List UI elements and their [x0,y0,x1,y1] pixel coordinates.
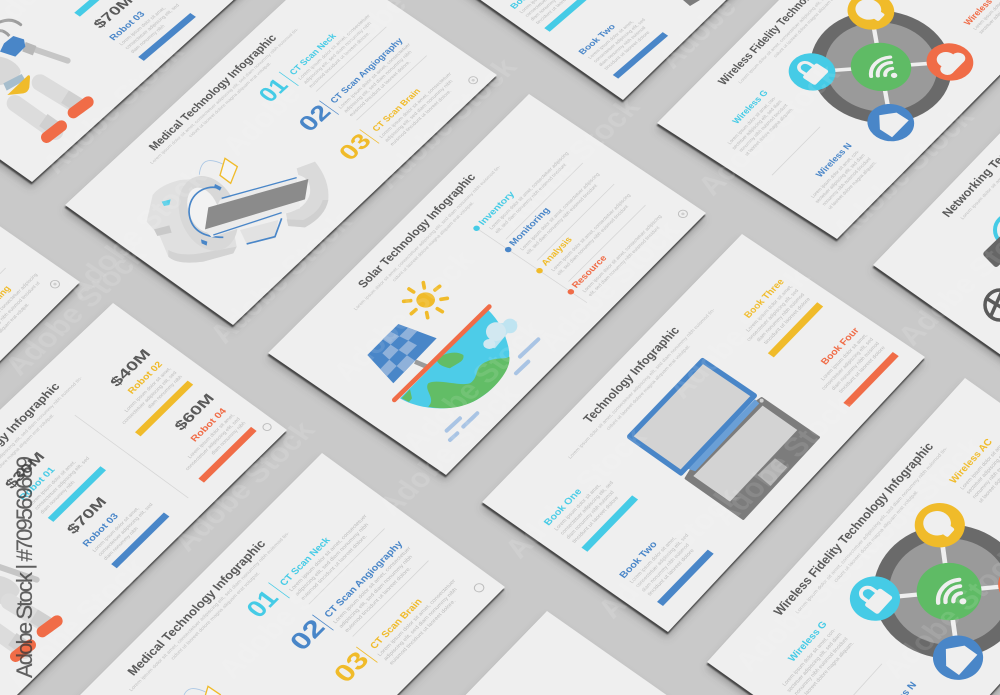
technology content: diam nonummy nibh euismod [641,542,691,593]
solar content: Lorem ipsum dolor sit amet, consectetuer adipiscing [550,193,632,273]
medical content: euismod tincidunt ut laoreet dolore. [300,534,369,601]
panel: wireless fidelity slide top [657,0,1000,239]
medical content: adipiscing elit, sed diam nonummy nibh [294,522,370,597]
robot content: consectetuer adipiscing elit, sed [121,370,179,426]
medical content: Medical Technology Infographic [125,537,269,678]
technology content: tincidunt ut laoreet dolore [763,296,812,346]
technology content: Lorem ipsum dolor sit amet, consectetuer adipiscing elit, sed diam nonummy nibh euismod tin- [567,307,716,460]
medical content: Medical Technology Infographic [147,33,280,153]
solar content: elit, sed diam nonummy nibh euismod tincidunt [556,204,631,277]
panel: networking slide right [873,0,1000,393]
illustration: laptop [630,361,819,519]
solar content: elit, sed diam nonummy nibh euismod tincidunt [525,183,600,256]
solar content: elit, sed diam nonummy nibh euismod tincidunt [587,225,662,298]
watermarks: Adobe Stock [166,416,322,557]
robot content: Lorem ipsum dolor sit amet, [123,366,173,414]
wireless content: Wireless G [786,619,830,664]
medical content: Lorem ipsum dolor sit amet, consectetuer adipiscing elit, sed diam nonummy nibh euismod tin- [128,531,291,693]
watermarks: Adobe Stock [0,240,154,381]
watermarks: Adobe Stock [825,103,981,244]
wireless content [681,0,1000,213]
medical content: adipiscing elit, sed diam nonummy nibh [302,21,373,85]
wireless content: nonummy nibh euismod tincidunt [821,156,873,207]
technology content: diam nonummy nibh euismod [830,341,881,392]
panel: robot slide bottom-left [0,303,287,695]
panel: networking slide left [0,158,80,541]
medical content [115,470,486,695]
medical content: adipiscing elit, sed diam nonummy nibh [343,49,413,113]
watermarks: Adobe Stock [691,60,847,201]
medical content: Lorem ipsum dolor sit amet, consectetuer [297,13,371,81]
robot content: diam nonummy nibh [210,421,248,456]
solar content: cidunt ut laoreet dolore magna aliquam erat volutpat. [391,200,475,282]
medical content: adipiscing elit, sed diam nonummy nibh [384,79,454,143]
medical content: Lorem ipsum dolor sit amet, consectetuer [378,71,453,139]
watermarks: Adobe Stock [395,316,551,457]
watermarks: Adobe Stock [705,390,861,531]
medical content: euismod tincidunt ut laoreet dolore. [344,566,413,634]
medical content: 02 [293,100,336,136]
wireless content: sectetuer adipiscing elit, sed diam [786,632,844,694]
robot content: $60M [171,391,217,433]
solar content: Lorem ipsum dolor sit amet, consectetuer adipiscing [519,172,601,252]
solar content: Analysis [539,235,574,267]
wireless content: Lorem ipsum dolor sit amet, con- [727,95,778,146]
medical content: 03 [328,647,375,688]
wireless content: Wireless AC [948,437,995,486]
book content: diam nonummy nibh euismod [598,25,647,67]
medical content: adipiscing elit, sed diam nonummy nibh [338,554,414,629]
watermarks: Adobe Stock [491,93,647,234]
medical content: CT Scan Angiography [322,539,406,620]
robot content: Lorem ipsum dolor sit amet, [92,506,141,553]
robot content: $70M [63,494,110,537]
icon: dark tile [982,233,1000,268]
technology content: consectetuer adipiscing elit, sed [559,480,615,536]
illustration: robot legs [0,566,57,656]
book content: tincidunt ut laoreet dolore [603,30,651,71]
technology content: tincidunt ut laoreet dolore [571,495,621,544]
wireless content: nonummy nibh euismod tincidunt [738,103,790,153]
wireless content: cidunt ut laoreet dolore magna aliquam erat volutpat. [833,489,920,584]
wireless content: Wireless N [813,141,854,179]
watermarks: Adobe Stock [58,163,214,304]
watermarks: Adobe Stock [728,536,884,677]
book content: Book Two [576,22,618,56]
technology content: consectetuer adipiscing elit, sed [821,337,875,391]
medical content: cidunt ut laoreet dolore magna aliquam erat volutpat. [170,571,262,661]
wireless content: ut laoreet dolore magna aliquam. [744,107,795,157]
solar content: Solar Technology Infographic [355,171,479,290]
panel: book slide top [445,0,888,100]
medical content: euismod tincidunt ut laoreet dolore. [389,599,457,666]
wireless content: sectetuer adipiscing elit, sed diam [814,153,867,204]
robot content: Robot 03 [80,511,120,548]
robot content: Robot 04 [188,406,229,443]
robot content: consectetuer adipiscing elit, sed [184,416,242,472]
medical content: 01 [241,586,284,623]
robot content: Lorem ipsum dolor sit amet, [187,413,236,460]
wireless content: ut laoreet dolore magna aliquam. [827,160,879,211]
illustration: MRI scanner [147,158,328,263]
robot content: diam nonummy nibh [130,24,167,55]
illustration: MRI top edge [182,686,220,695]
medical content: 03 [333,129,377,165]
illustration: laptop corner [683,0,700,6]
solar content: Monitoring [507,206,552,247]
medical content: Lorem ipsum dolor sit amet, consectetuer [288,514,369,593]
robot content: Robot 03 [107,9,147,42]
medical content: CT Scan Angiography [328,36,405,105]
medical content: Lorem ipsum dolor sit amet, consectetuer [377,578,457,658]
watermarks: Adobe Stock [591,483,747,624]
watermarks: Adobe Stock [835,433,991,574]
medical content: Lorem ipsum dolor sit amet, consectetuer [332,546,413,625]
diagram: wifi hub [839,494,1000,689]
robot content: $40M [106,346,154,389]
watermarks: Adobe Stock [35,38,191,179]
watermarks: Adobe Stock [371,380,527,521]
wireless content: Wireless Fidelity Technology Infographic [771,440,936,618]
technology content: Lorem ipsum dolor sit amet, [553,483,603,532]
wireless content: Lorem ipsum dolor sit amet, con- [782,628,838,688]
icon: cyan ring [995,215,1000,245]
technology content: tincidunt ut laoreet dolore [838,345,887,394]
stock id watermark: Adobe Stock | #709569689 [12,456,37,678]
watermarks: Adobe Stock [498,423,654,564]
watermarks: Adobe Stock [326,246,482,387]
panel: wireless fidelity slide bottom [707,378,1000,695]
medical content: CT Scan Brain [370,87,423,133]
robot content: diam nonummy nibh [147,374,184,410]
technology content: Book Four [819,325,861,366]
wireless content [732,396,1000,695]
medical content: Lorem ipsum dolor sit amet, consectetuer [337,42,412,110]
medical content: 01 [253,74,293,106]
wireless content: nonummy nibh euismod tincidunt [793,636,850,695]
robot content [0,315,273,626]
wireless content: Wireless G [730,88,770,125]
medical content: 02 [285,615,331,655]
technology content: Lorem ipsum dolor sit amet, [745,284,794,333]
medical content: euismod tincidunt ut laoreet dolore. [389,89,453,146]
technology content: diam nonummy nibh euismod [565,490,616,540]
book content: consectetuer adipiscing elit, sed [592,17,647,63]
robot content: $70M [90,0,136,31]
panel: solar technology slide [268,94,706,475]
watermarks: Adobe Stock [215,20,371,161]
robot content: diam nonummy nibh [103,526,140,562]
diagram: wifi hub [778,0,983,149]
technology content: tincidunt ut laoreet dolore [647,548,696,597]
medical content: cidunt ut laoreet dolore magna aliquam erat volutpat. [188,61,272,138]
technology content: cidunt ut laoreet dolore magna aliquam erat volutpat. [605,344,691,431]
technology content: consectetuer adipiscing elit, sed [746,288,800,343]
robot content: consectetuer adipiscing elit, sed [124,3,181,51]
technology content: Book Two [617,539,659,580]
book content: Lorem ipsum dolor sit amet, [587,19,635,60]
robot content: Robot 02 [125,360,164,396]
watermarks: Adobe Stock [661,263,817,404]
book content [508,0,669,79]
watermarks: Adobe Stock [211,543,367,684]
medical content: euismod tincidunt ut laoreet dolore. [308,31,371,88]
solar content: elit, sed diam nonummy nibh euismod tincidunt [494,162,569,235]
robot content [74,0,196,61]
solar content: Inventory [476,189,516,227]
solar content: Lorem ipsum dolor sit amet, consectetuer adipiscing elit, sed diam nonummy nibh euismod tin- [353,164,502,311]
panel: blank slide bottom centre [285,611,732,695]
panel: robot slide top-left [0,0,300,182]
technology content: Technology Infographic [580,324,683,426]
technology content: diam nonummy nibh euismod [756,292,806,343]
networking content [0,254,61,369]
watermarks: Adobe Stock [368,53,524,194]
icon: globe [985,290,1000,320]
watermarks: Adobe Stock [203,208,359,349]
medical content: CT Scan Neck [287,31,338,77]
wireless content: sectetuer adipiscing elit, sed diam [731,99,784,151]
watermarks: Adobe Stock [0,553,154,694]
solar content [339,107,689,405]
medical content: Lorem ipsum dolor sit amet, consectetuer adipiscing elit, sed diam nonummy nibh euismod tin- [149,27,300,165]
medical content: CT Scan Neck [278,535,333,588]
watermarks: Adobe Stock [531,216,687,357]
medical content: adipiscing elit, sed diam nonummy nibh [383,587,459,662]
robot content: Lorem ipsum dolor sit amet, [118,6,167,47]
technology content [504,248,903,606]
solar content: Resource [570,253,609,290]
technology content: Book Three [742,277,786,320]
illustration: sun, solar panel and globe [367,283,538,440]
technology content: Lorem ipsum dolor sit amet, [629,536,678,585]
robot content: $30M [1,449,48,491]
robot content: consectetuer adipiscing elit, sed [97,502,155,557]
robot content: consectetuer adipiscing elit, sed [34,456,91,511]
panel: medical technology slide bottom [37,453,505,695]
panel: medical technology slide top [65,0,497,325]
illustration: robot [0,20,88,137]
robot content: diam nonummy nibh [39,480,77,515]
robot content: Lorem ipsum dolor sit amet, [28,460,78,507]
wireless content: Lorem ipsum dolor sit amet, consectetuer adipiscing elit, sed diam nonummy nibh euismod tin- [795,446,950,615]
technology content: consectetuer adipiscing elit, sed [635,533,691,589]
robot content: Robot 01 [17,465,57,502]
medical content: euismod tincidunt ut laoreet dolore. [348,60,412,117]
medical content: CT Scan Brain [368,597,425,651]
solar content: Lorem ipsum dolor sit amet, consectetuer adipiscing [488,151,570,231]
medical content [138,0,479,259]
technology content: Lorem ipsum dolor sit amet, [820,333,869,382]
technology content: Book One [542,487,584,527]
solar content: Lorem ipsum dolor sit amet, consectetuer adipiscing [582,214,664,294]
panel: technology laptop slide [482,234,925,632]
wireless content: Lorem ipsum dolor sit amet, con- [810,149,862,199]
